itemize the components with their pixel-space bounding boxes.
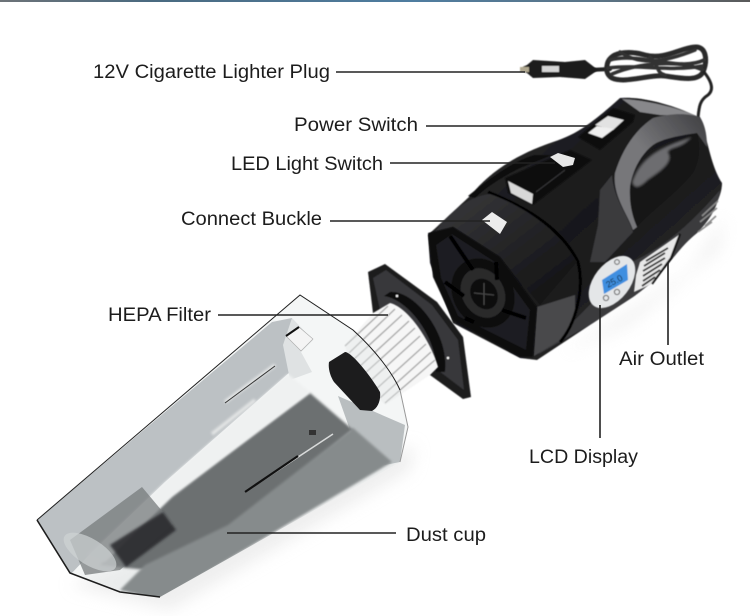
lower chamber xyxy=(120,428,392,600)
segment seam xyxy=(488,192,580,342)
label: Air Outlet xyxy=(619,263,705,370)
HEPA filter plate xyxy=(368,264,471,399)
black connector xyxy=(329,352,380,411)
hood upper ridge xyxy=(468,155,552,198)
lower rear panel xyxy=(537,190,720,355)
bright light band xyxy=(111,374,310,555)
HEPA filter cartridge xyxy=(345,303,438,405)
label: LED Light Switch: LED Light Switch xyxy=(231,154,383,175)
mid body grey reflection xyxy=(590,175,633,262)
cup outline xyxy=(37,295,400,520)
cup interior surfaces xyxy=(37,318,405,600)
lighter rim wedge xyxy=(283,318,313,380)
dark middle chamber xyxy=(100,393,353,570)
cup and body floor shadows xyxy=(70,215,725,610)
vacuum main body xyxy=(428,98,722,360)
side grey reflection xyxy=(534,295,575,356)
upper grey wall xyxy=(37,318,300,575)
icon: front fan grille xyxy=(428,227,537,357)
label: Power Switch: Power Switch xyxy=(294,115,418,136)
body shell xyxy=(428,98,722,360)
label: 12V Cigarette Lighter Plug: 12V Cigarette Lighter Plug xyxy=(93,62,330,83)
top light panel xyxy=(622,99,697,116)
label: LCD Display: LCD Display xyxy=(529,447,639,468)
grey handle band xyxy=(615,114,707,230)
label: HEPA Filter: HEPA Filter xyxy=(108,305,212,326)
icon: LCD display xyxy=(579,247,645,317)
nozzle tube xyxy=(70,487,160,575)
label: Dust cup: Dust cup xyxy=(406,525,486,546)
icon: LED light switch xyxy=(550,153,575,167)
icon: cigarette lighter plug xyxy=(520,60,598,79)
icon: air outlet grille xyxy=(634,234,680,292)
handle see-through upper xyxy=(632,137,692,187)
icon: LCD display: 25.0 xyxy=(604,273,624,290)
label: Connect Buckle: Connect Buckle xyxy=(181,209,322,230)
icon: power switch buttons xyxy=(578,108,635,150)
cup shell translucent rim xyxy=(37,295,408,597)
mid upper ribs xyxy=(212,365,275,434)
thin latch and ridge xyxy=(245,434,333,492)
rear vents xyxy=(698,201,718,232)
cup clip window xyxy=(286,327,313,351)
icon: power cord and coil xyxy=(590,47,711,118)
icon: connect buckle xyxy=(482,212,507,234)
top image strip xyxy=(0,0,750,2)
front hood highlight xyxy=(432,194,577,305)
right rim grey wall xyxy=(338,396,405,465)
label: Air Outlet: Air Outlet xyxy=(619,349,705,370)
icon: LED lamp xyxy=(505,150,592,205)
handle opening dark interior xyxy=(629,133,699,227)
dust cup xyxy=(37,295,408,600)
